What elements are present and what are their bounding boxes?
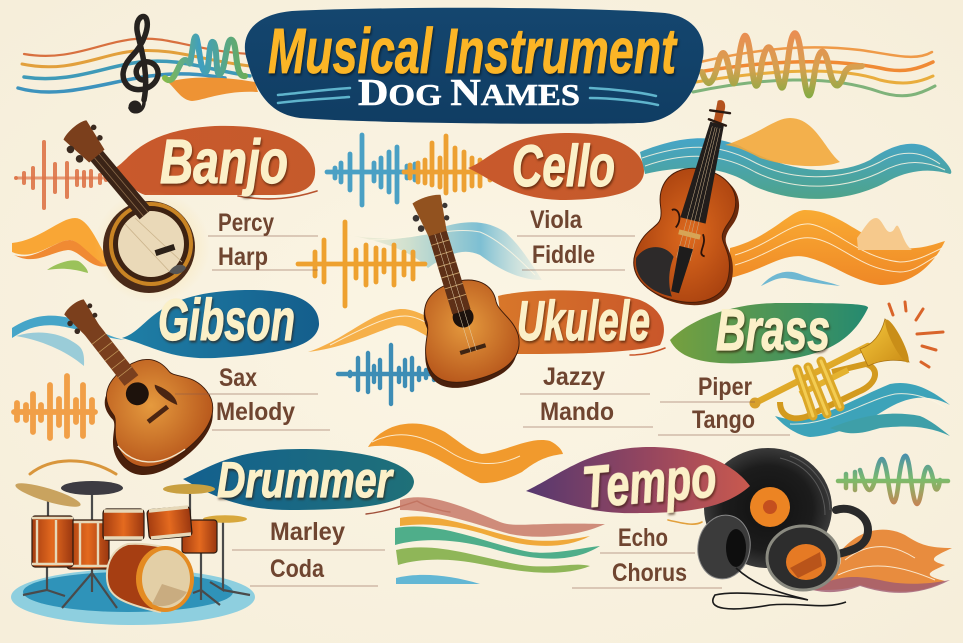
sound wave: ukulele left blue — [338, 345, 435, 404]
tom: far right — [182, 520, 217, 553]
sound wave: banjo cont — [16, 176, 110, 180]
cymbal: far right — [203, 515, 247, 523]
title text: musical instrument: Musical Instrument — [268, 15, 678, 87]
floor — [11, 569, 255, 625]
cello heading: Cello — [512, 134, 615, 199]
headphone left cup — [693, 511, 755, 583]
tom: fourth — [147, 506, 192, 540]
banner: cello — [468, 133, 644, 200]
kick drum — [107, 544, 168, 612]
headphone cord — [713, 568, 846, 609]
drummer flourish — [366, 501, 450, 514]
banner: drummer — [183, 449, 450, 514]
tom: second — [67, 520, 109, 569]
name: percy: Percy — [218, 209, 274, 237]
sound wave: cello left blue — [327, 135, 420, 205]
wave: blue behind ukulele — [337, 222, 542, 280]
icon: gibson guitar — [25, 272, 230, 491]
icon: trumpet — [750, 317, 912, 418]
wave: rainbow left of tempo — [395, 497, 605, 584]
icon: burst lines — [889, 302, 943, 367]
name: chorus: Chorus — [612, 559, 687, 587]
brass heading: Brass — [716, 298, 830, 363]
cymbal: right — [163, 484, 215, 494]
wave: orange above drummer right — [368, 423, 563, 483]
name: sax: Sax — [219, 364, 257, 392]
decoration: small blue wave — [761, 272, 840, 286]
title accent lines — [278, 88, 658, 105]
drummer heading: Drummer — [217, 452, 394, 508]
wave: orange left of banjo — [12, 218, 108, 273]
decoration: top left staff waves — [18, 37, 258, 101]
tempo heading: Tempo — [580, 444, 719, 521]
icon: ukulele — [379, 183, 529, 397]
name: viola: Viola — [530, 206, 583, 234]
names: tempo — [572, 524, 722, 588]
name: coda: Coda — [270, 555, 325, 583]
decoration: peach hump — [857, 218, 912, 250]
names: drummer — [232, 518, 385, 586]
vinyl record — [704, 448, 832, 568]
banjo heading: Banjo — [160, 128, 288, 197]
names: brass — [658, 373, 790, 435]
names: cello — [517, 206, 635, 270]
name: tango: Tango — [692, 406, 755, 434]
wave: orange right of headphones — [812, 530, 952, 593]
banjo flourish — [238, 191, 317, 199]
names: ukulele — [520, 363, 653, 427]
sound wave: cello left orange — [404, 136, 500, 193]
icon: drum kit — [11, 479, 255, 625]
wave: orange left of ukulele — [308, 309, 452, 352]
names: banjo — [208, 209, 318, 271]
ukulele heading: Ukulele — [517, 289, 650, 352]
banner: tempo — [526, 444, 750, 521]
name: harp: Harp — [218, 243, 268, 271]
name: piper: Piper — [698, 373, 752, 401]
wave: teal behind trumpet — [775, 383, 950, 437]
vinyl label — [750, 487, 790, 527]
green leaf accent — [47, 260, 88, 273]
tom: third — [103, 509, 144, 540]
names: gibson — [175, 364, 330, 430]
name: fiddle: Fiddle — [532, 241, 595, 269]
decoration: small arc over drums — [30, 461, 116, 474]
icon: banjo — [58, 116, 210, 303]
ukulele flourish — [630, 348, 665, 355]
cymbal: left — [14, 479, 82, 511]
icon: treble clef — [123, 16, 158, 114]
icon: violin — [626, 89, 773, 315]
sound wave: right rainbow — [838, 456, 948, 504]
stands — [23, 490, 250, 608]
decoration: orange striped hump — [725, 118, 840, 166]
gibson heading: Gibson — [158, 288, 295, 353]
headphone right cup — [767, 526, 839, 590]
banner: brass — [670, 298, 868, 363]
wave: blue behind violin — [640, 138, 951, 199]
name: mando: Mando — [540, 398, 614, 426]
decoration: tempo flourish — [668, 520, 702, 524]
name: marley: Marley — [270, 518, 345, 546]
name: melody: Melody — [216, 398, 295, 426]
title banner — [245, 8, 704, 124]
name: echo: Echo — [618, 524, 668, 552]
title text: dog names: DOG NAMES — [358, 72, 580, 114]
banner: banjo — [115, 126, 317, 199]
tom: left — [32, 516, 73, 567]
sound wave: gibson left orange — [14, 376, 95, 438]
headphone band — [836, 509, 868, 554]
wave: gibson left blue — [12, 316, 125, 366]
sound wave: banjo left — [16, 142, 106, 208]
icon: vinyl record and headphones — [693, 448, 868, 609]
banner: ukulele — [498, 290, 665, 355]
name: jazzy: Jazzy — [543, 363, 605, 391]
wave: orange right of violin — [730, 210, 945, 285]
banner: gibson — [122, 288, 319, 358]
cymbal: dark — [61, 481, 123, 495]
sound wave: ukulele left orange — [298, 222, 425, 306]
decoration: top right staff waves — [693, 33, 935, 96]
